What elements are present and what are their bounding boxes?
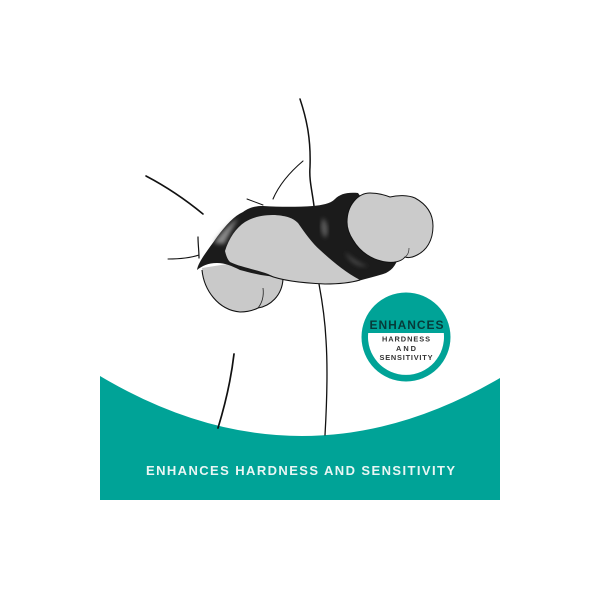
badge: enhances hardness and sensitivity	[362, 292, 450, 382]
grey body	[225, 215, 360, 284]
badge text: AND	[396, 344, 417, 353]
lower grey form	[202, 262, 283, 312]
badge text: HARDNESS	[382, 334, 430, 344]
grey rounded end	[347, 193, 433, 262]
sleeve highlights	[321, 218, 328, 238]
black sleeve	[197, 193, 400, 281]
banner caption: ENHANCES HARDNESS AND SENSITIVITY	[146, 463, 455, 478]
contour lines of the diagram	[146, 99, 327, 435]
badge text	[380, 334, 433, 362]
badge text: SENSITIVITY	[380, 353, 433, 362]
badge heading: ENHANCES	[370, 318, 444, 332]
body lower outline	[268, 275, 360, 284]
badge lower white panel	[368, 333, 444, 375]
bottom teal banner	[100, 376, 500, 500]
